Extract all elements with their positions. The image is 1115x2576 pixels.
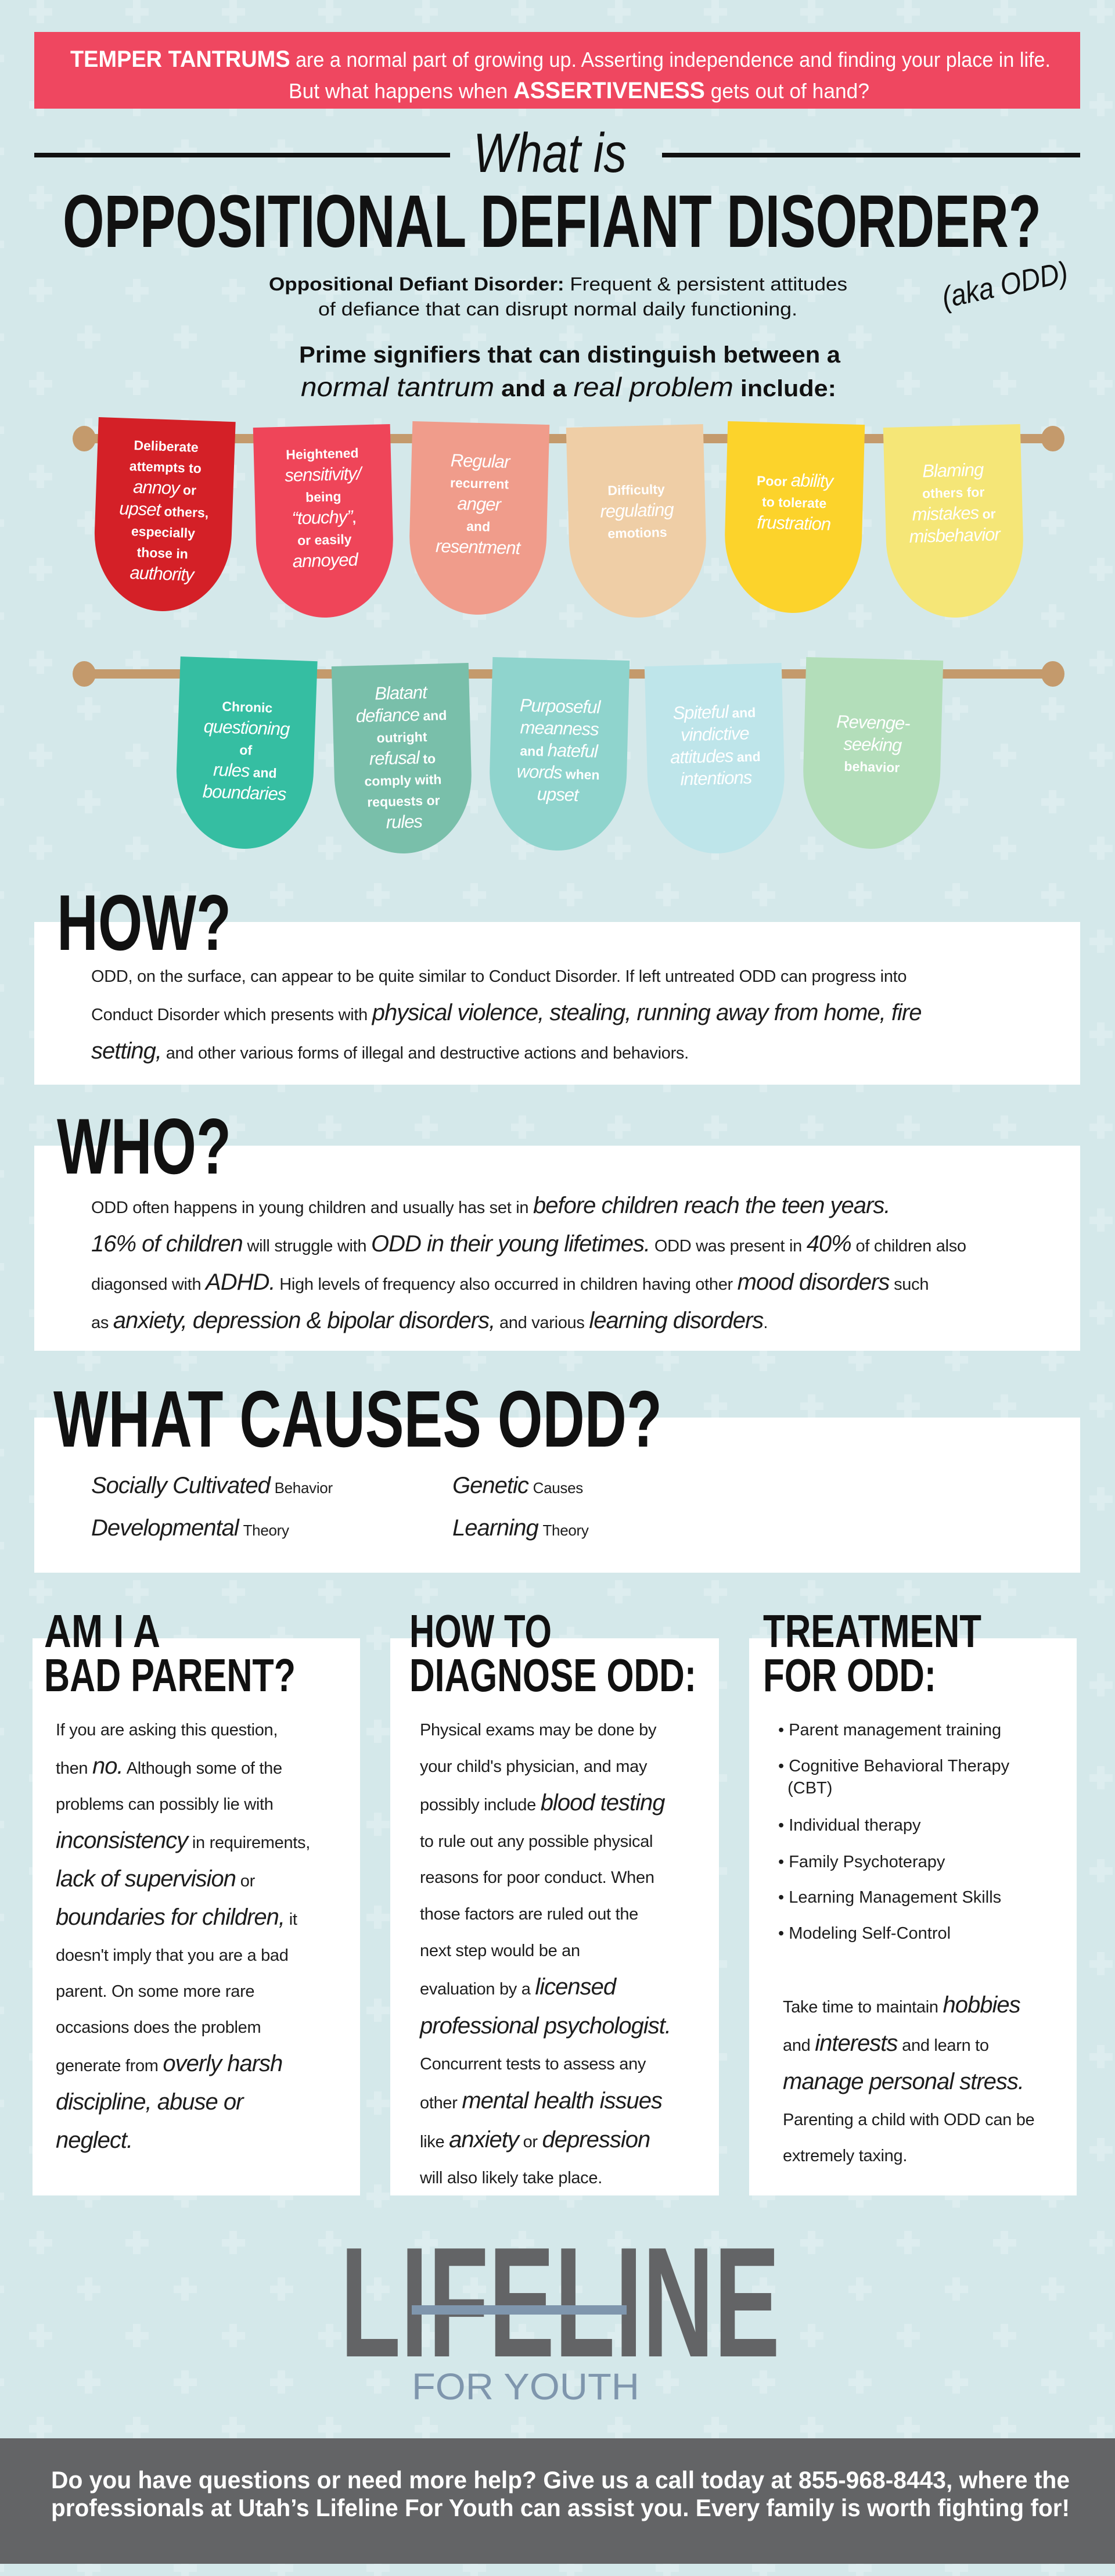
treatment list: • Individual therapy (778, 1816, 921, 1835)
flag: blaming (883, 424, 1025, 619)
heading: What is: What is (473, 122, 627, 184)
rod row 1 (73, 426, 1064, 451)
text: like anxiety or depression (420, 2127, 650, 2152)
treatment list: • Family Psychoterapy (778, 1853, 945, 1871)
flag: questioning: rules and (213, 759, 277, 781)
flag: meanness: words when (516, 761, 600, 783)
text: how: setting, and other various forms of illegal and destructive actions and behaviors. (91, 1038, 689, 1064)
flag: blaming: misbehavior (909, 524, 1000, 547)
flag: regulating: emotions (607, 525, 667, 541)
intro banner: But what happens when ASSERTIVENESS gets out of hand? (289, 78, 869, 103)
flag: blaming: others for (922, 485, 985, 501)
text: then no. Although some of the (56, 1753, 282, 1779)
text: to rule out any possible physical (420, 1832, 653, 1851)
definition (269, 274, 847, 320)
causes list (91, 1473, 589, 1541)
flag: questioning (174, 656, 318, 851)
flag: deliberate: authority (130, 562, 194, 585)
flag: deliberate: those in (136, 544, 188, 561)
flag: spiteful (645, 663, 786, 855)
text: self care (783, 1992, 1034, 2165)
flag: deliberate: Deliberate (134, 437, 199, 455)
treatment list: • Parent management training (778, 1721, 1001, 1739)
text: your child's physician, and may (420, 1757, 647, 1776)
text: inconsistency in requirements, (56, 1828, 310, 1853)
text: evaluation by a licensed (420, 1974, 616, 2000)
text: Physical exams may be done by (420, 1721, 656, 1739)
flag: sensitivity (253, 424, 395, 619)
text: who: as anxiety, depression & bipolar disorders, and various learning disorders. (91, 1308, 768, 1333)
text: problems can possibly lie with (56, 1795, 274, 1814)
flag: sensitivity: “touchy”, (292, 507, 356, 528)
flag: anger: Regular (450, 450, 510, 472)
text: who: 16% of children will struggle with ODD in their young lifetimes. ODD was present in 40% of children also (91, 1231, 966, 1257)
flag: defiance: comply with (364, 772, 442, 789)
text: parent. On some more rare (56, 1982, 254, 2001)
text: generate from overly harsh (56, 2051, 282, 2076)
flag: defiance: requests or (367, 792, 440, 810)
treatment list: • Modeling Self-Control (778, 1924, 951, 1943)
footer: professionals at Utah’s Lifeline For Youth can assist you. Every family is worth fighting for! (51, 2494, 1070, 2521)
flag: deliberate: upset others, (119, 498, 209, 521)
flag: defiance: Blatant (375, 682, 427, 704)
text: occasions does the problem (56, 2018, 261, 2037)
flag: anger: resentment (436, 536, 520, 558)
panel: who (34, 1146, 1080, 1351)
intro banner (34, 32, 1080, 109)
text: reasons for poor conduct. When (420, 1868, 654, 1887)
intro banner: TEMPER TANTRUMS are a normal part of growing up. Asserting independence and finding your place in life. (70, 46, 1051, 72)
flag: frustration (723, 421, 865, 615)
flag: anger: and (466, 518, 490, 534)
flag: anger: anger (457, 493, 501, 515)
logo: FOR YOUTH (412, 2366, 639, 2408)
flag: sensitivity: or easily (297, 532, 352, 548)
flag: sensitivity: Heightened (286, 445, 359, 462)
flag: anger: recurrent (450, 475, 509, 491)
text: how: ODD, on the surface, can appear to be quite similar to Conduct Disorder. If left untreated ODD can progress into (91, 967, 907, 986)
text: professional psychologist. (420, 2013, 671, 2039)
treatment list (778, 1721, 1009, 1943)
definition: Oppositional Defiant Disorder: Frequent & persistent attitudes (269, 274, 847, 295)
text: self care: manage personal stress. (783, 2069, 1024, 2094)
text: neglect. (56, 2127, 132, 2153)
flag: blaming: mistakes or (912, 503, 996, 525)
flag: defiance: outright (376, 729, 427, 745)
flag: questioning: of (239, 742, 253, 758)
flag: regulating: Difficulty (607, 482, 665, 498)
text: boundaries for children, it (56, 1904, 297, 1930)
text: doesn't imply that you are a bad (56, 1946, 289, 1965)
heading (44, 1605, 296, 1696)
flag: sensitivity: annoyed (292, 550, 358, 571)
heading: AM I A (44, 1605, 160, 1657)
definition: of defiance that can disrupt normal daily functioning. (318, 299, 797, 320)
flag: spiteful: attitudes and (670, 745, 761, 767)
footer: Do you have questions or need more help? Give us a call today at 855-968-8443, where the (51, 2466, 1070, 2494)
flag: deliberate: attempts to (129, 458, 202, 476)
causes list: Learning Theory (452, 1515, 589, 1541)
text (419, 1721, 671, 2187)
flag: deliberate (92, 417, 236, 613)
heading (763, 1605, 981, 1696)
text: who (91, 1193, 966, 1333)
rod row 2 (73, 661, 1064, 687)
flag: questioning: Chronic (222, 699, 273, 716)
heading (409, 1605, 696, 1696)
flag: defiance: refusal to (369, 747, 436, 769)
panel: treatment (749, 1638, 1077, 2195)
flag: meanness: Purposeful (520, 695, 600, 717)
footer (0, 2438, 1115, 2564)
panel: diagnose (390, 1638, 719, 2195)
flag: spiteful: intentions (680, 767, 752, 790)
flag: defiance: rules (386, 811, 422, 833)
flag: questioning: boundaries (202, 781, 286, 804)
text (56, 1721, 310, 2153)
text: possibly include blood testing (420, 1790, 665, 1816)
panel: how (34, 922, 1080, 1085)
text: who: diagonsed with ADHD. High levels of frequency also occurred in children having other mood disorders such (91, 1269, 929, 1295)
flag: meanness (488, 657, 630, 852)
flag: deliberate: especially (131, 523, 195, 541)
text: lack of supervision or (56, 1866, 255, 1892)
signifiers intro: Prime signifiers that can distinguish between a (299, 342, 841, 368)
flag: defiance (332, 663, 473, 855)
causes list: Developmental Theory (91, 1515, 289, 1541)
flag: revenge: behavior (844, 759, 900, 775)
flag: anger (408, 421, 549, 616)
causes list: Socially Cultivated Behavior (91, 1473, 333, 1498)
flag: frustration: frustration (757, 512, 831, 534)
flag: spiteful: vindictive (681, 723, 749, 745)
text: discipline, abuse or (56, 2089, 243, 2115)
causes list: Genetic Causes (452, 1473, 583, 1498)
flag: sensitivity: sensitivity/ (285, 463, 361, 486)
text: who: ODD often happens in young children and usually has set in before children reach the teen years. (91, 1193, 890, 1218)
flag: questioning: questioning (203, 716, 290, 740)
flag: frustration: Poor ability (757, 470, 833, 491)
heading: What is (34, 122, 1080, 184)
text: how: Conduct Disorder which presents with physical violence, stealing, running away from home, fire (91, 1000, 921, 1025)
text: If you are asking this question, (56, 1721, 278, 1739)
flag: revenge: seeking (843, 734, 902, 755)
flag: revenge (801, 657, 943, 851)
heading: HOW TO (409, 1605, 552, 1657)
treatment list: • Learning Management Skills (778, 1888, 1001, 1907)
flag: blaming: Blaming (922, 460, 984, 481)
flag: regulating (566, 424, 708, 619)
text: Concurrent tests to assess any (420, 2055, 646, 2073)
text: self care: Parenting a child with ODD can be (783, 2111, 1034, 2129)
text: those factors are ruled out the (420, 1905, 638, 1924)
panel: bad parent (33, 1638, 360, 2195)
text: self care: Take time to maintain hobbies (783, 1992, 1020, 2018)
flag: meanness: and hateful (520, 740, 598, 762)
flag: meanness: upset (537, 784, 578, 805)
text: will also likely take place. (420, 2169, 602, 2187)
signifiers intro: normal tantrum and a real problem include: (301, 372, 836, 402)
flag: defiance: defiance and (355, 704, 447, 726)
text: other mental health issues (420, 2088, 662, 2114)
text: self care: extremely taxing. (783, 2147, 907, 2165)
flag: frustration: to tolerate (762, 494, 827, 511)
panel: causes (34, 1418, 1080, 1573)
treatment list: • Cognitive Behavioral Therapy (778, 1757, 1009, 1775)
text: self care: and interests and learn to (783, 2030, 989, 2056)
flag: deliberate: annoy or (133, 476, 196, 498)
flag: spiteful: Spiteful and (672, 701, 756, 723)
flag: sensitivity: being (305, 489, 341, 505)
treatment list: (CBT) (787, 1779, 832, 1798)
flag: revenge: Revenge- (836, 711, 910, 734)
flag: regulating: regulating (600, 499, 674, 522)
text: how (91, 967, 921, 1064)
signifiers intro (299, 342, 841, 402)
heading: TREATMENT (763, 1605, 981, 1657)
flag: meanness: meanness (520, 717, 599, 740)
text: next step would be an (420, 1942, 580, 1960)
